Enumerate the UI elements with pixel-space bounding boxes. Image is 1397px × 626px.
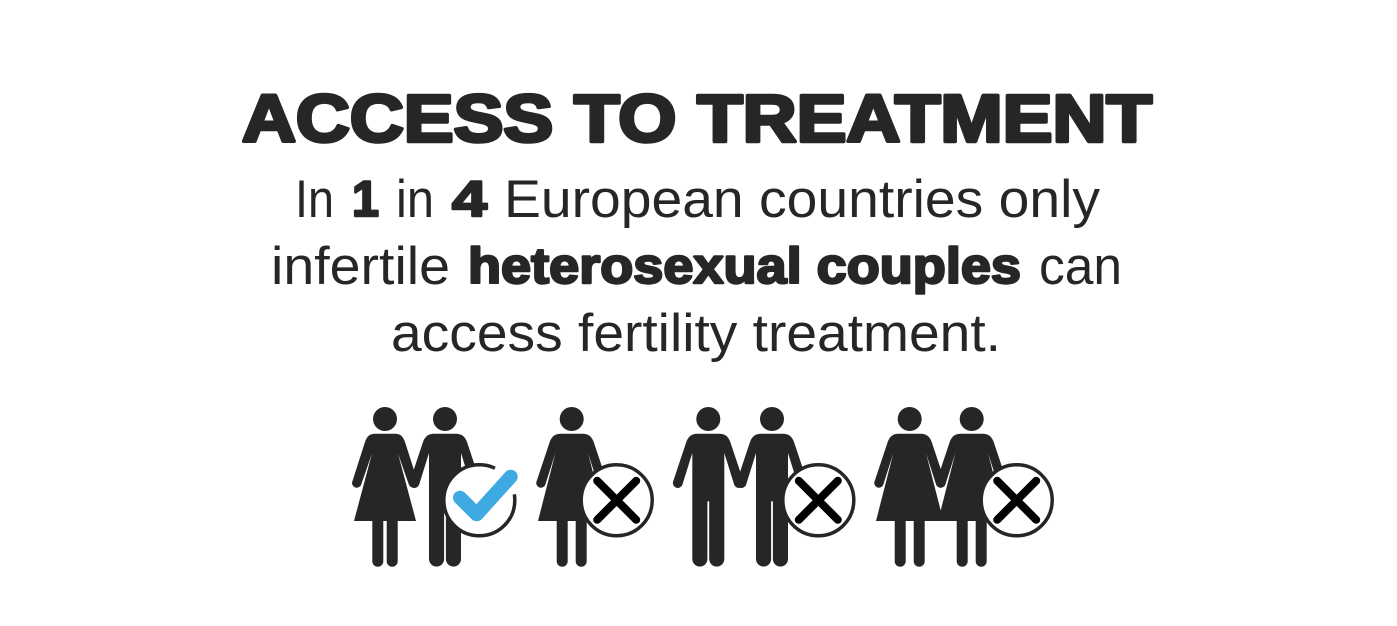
text block: description: can: [1039, 237, 1122, 296]
icon: single woman with cross: [536, 407, 652, 567]
text block: description: In: [295, 170, 334, 229]
text block: description: access fertility treatment.: [391, 304, 1001, 363]
icon: two women with cross: [874, 407, 1052, 567]
text block: description: European countries only: [504, 170, 1101, 229]
text block: description: infertile: [271, 237, 450, 296]
icon: two men with cross: [673, 407, 854, 567]
text block: description: 1: [352, 171, 379, 227]
icon: heterosexual couple with check mark: [352, 407, 529, 567]
title: ACCESS TO TREATMENT: [242, 82, 1152, 156]
text block: description: heterosexual couples: [468, 238, 1021, 294]
text block: description: in: [396, 170, 434, 229]
text block: description: [271, 170, 1122, 363]
text block: description: 4: [452, 171, 487, 227]
